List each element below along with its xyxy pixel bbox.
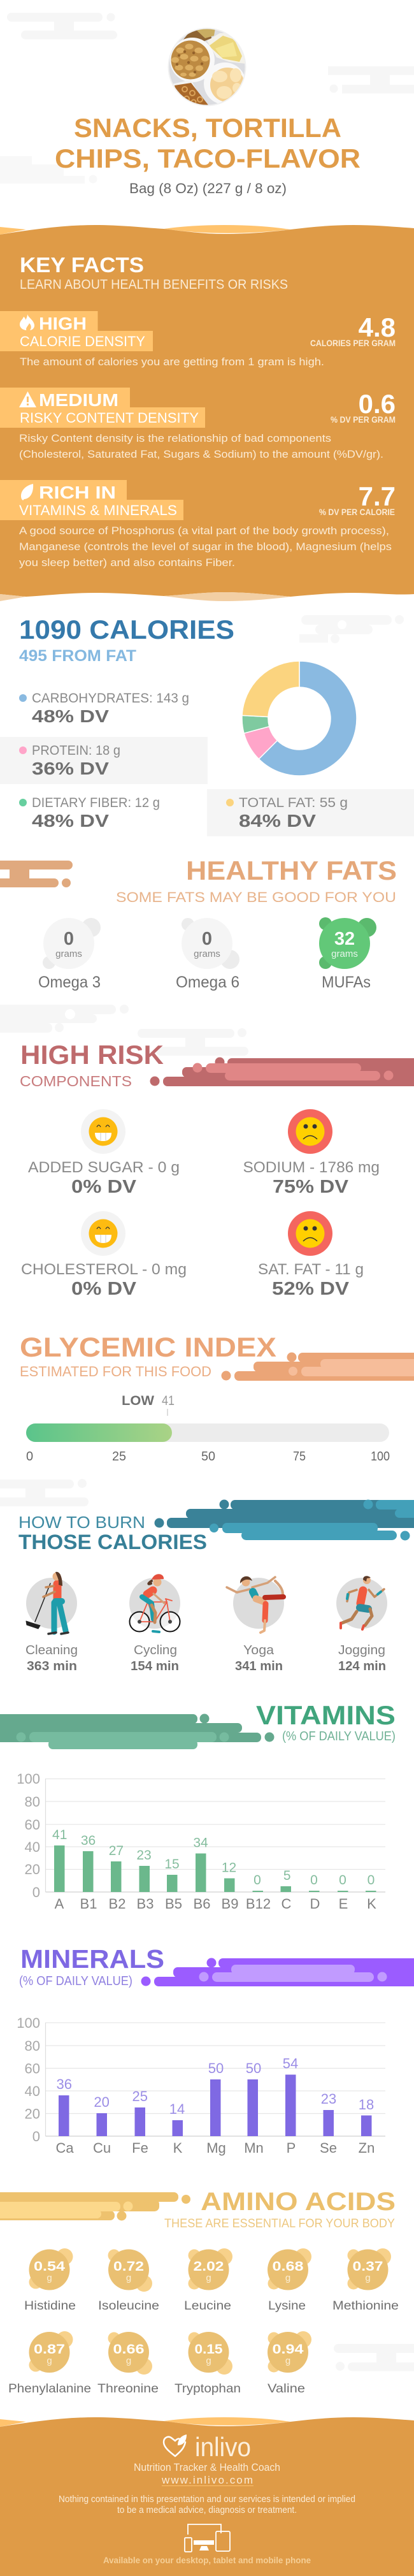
- footer disclaimer: [59, 2494, 355, 2515]
- section banner: how to burn: [154, 1499, 414, 1540]
- risk item: cholesterol: 0% DV: [71, 1279, 137, 1299]
- bar chart: minerals: 20: [94, 2094, 110, 2110]
- key fact: risky content density: MEDIUM: [39, 390, 118, 410]
- bar chart: vitamins: B9: [222, 1896, 238, 1912]
- activity labels: 154 min: [131, 1659, 179, 1673]
- legend: total fat: 84% DV: [239, 811, 316, 831]
- amino bubble: tryptophan: [175, 2332, 241, 2396]
- fat bubble: omega 3: grams: [55, 949, 82, 959]
- heading: healthy fats: [116, 855, 397, 905]
- activity: cycling: [129, 1574, 180, 1632]
- logo: inlivo: inlivo: [195, 2432, 251, 2462]
- fat bubble: omega 6: grams: [194, 949, 220, 959]
- section banner: amino acids: [0, 2192, 190, 2221]
- amino bubble: lysine: Lysine: [268, 2299, 306, 2313]
- food photo: bowls of snacks: [168, 28, 246, 106]
- panel: key facts background with waves: [0, 225, 414, 601]
- background cloud: calories: [299, 615, 404, 643]
- bar chart: minerals: 40: [25, 2083, 40, 2099]
- background cloud: amino acids: [334, 2344, 414, 2371]
- section banner: vitamins: [0, 1714, 274, 1749]
- glycemic index gauge: 0: [26, 1450, 33, 1464]
- key fact: rich in vitamins and minerals: Manganese (controls the level of sugar in the blood), Magnesium (helps: [19, 541, 392, 553]
- bar chart: vitamins: D: [310, 1896, 320, 1912]
- section banner: healthy fats: [0, 861, 73, 887]
- bar chart: vitamins: 0: [32, 1884, 40, 1900]
- activity: jogging: [336, 1576, 387, 1629]
- amino bubble: threonine: Threonine: [97, 2382, 159, 2396]
- key fact: rich in vitamins and minerals: 7.7: [359, 481, 396, 511]
- heading: key facts: LEARN ABOUT HEALTH BENEFITS OR RISKS: [20, 277, 288, 292]
- key fact: risky content density: (Cholesterol, Saturated Fat, Sugars & Sodium) to the amount (%DV/gr).: [19, 448, 383, 460]
- bar chart: vitamins: 60: [25, 1817, 40, 1833]
- bar chart: vitamins: 0: [339, 1873, 346, 1888]
- risk item: added sugar: 0% DV: [71, 1177, 137, 1197]
- bar chart: minerals: 54: [283, 2055, 298, 2072]
- fat bubble: MUFAs: 32: [334, 929, 355, 949]
- bar chart: minerals: Ca: [55, 2140, 74, 2156]
- amino bubble: phenylalanine: 0.87: [34, 2342, 65, 2357]
- heading: how to burn: [18, 1513, 207, 1554]
- key fact: rich in vitamins and minerals: VITAMINS & MINERALS: [19, 502, 177, 518]
- legend: carbohydrates: CARBOHYDRATES: 143 g: [32, 691, 189, 706]
- amino bubble: valine: [268, 2331, 311, 2396]
- heading: vitamins: [256, 1700, 396, 1743]
- risk item: sodium: 75% DV: [273, 1177, 349, 1197]
- risk item: saturated fat: [258, 1211, 364, 1299]
- icon: warning triangle: [19, 391, 36, 407]
- glycemic index gauge: [26, 1394, 390, 1464]
- glycemic index gauge: 100: [371, 1450, 390, 1464]
- glycemic index gauge: 50: [201, 1450, 215, 1464]
- fat bubble: omega 3: 0: [64, 929, 74, 949]
- bar chart: vitamins: B1: [80, 1896, 97, 1912]
- bar chart: vitamins: 34: [193, 1836, 208, 1850]
- amino bubble: lysine: 0.68: [273, 2259, 304, 2274]
- background cloud: top left: [7, 13, 117, 40]
- key fact: calorie density: 4.8: [359, 312, 396, 342]
- key fact: rich in vitamins and minerals: % DV PER CALORIE: [319, 507, 395, 517]
- amino bubble: valine: 0.94: [273, 2342, 304, 2357]
- heading: how to burn: THOSE CALORIES: [18, 1531, 207, 1554]
- activity labels: Jogging: [338, 1643, 385, 1657]
- amino bubble: leucine: 2.02: [194, 2259, 224, 2274]
- bar chart: minerals: Fe: [132, 2140, 148, 2156]
- footer tagline: Nutrition Tracker & Health Coach: [134, 2461, 280, 2473]
- risk item: added sugar: [28, 1109, 180, 1197]
- amino bubble: threonine: [97, 2332, 159, 2396]
- legend: dietary fiber: [19, 796, 160, 831]
- bar chart: minerals: 50: [246, 2060, 261, 2076]
- heading: vitamins: VITAMINS: [256, 1700, 396, 1730]
- heading: key facts: KEY FACTS: [20, 253, 144, 277]
- bar chart: vitamins: B6: [194, 1896, 210, 1912]
- amino bubble: histidine: 0.54: [34, 2259, 65, 2274]
- bar chart: vitamins: 100: [17, 1771, 40, 1787]
- key fact: risky content density: Risky Content density is the relationship of bad components: [19, 432, 331, 444]
- heading: minerals: MINERALS: [20, 1944, 164, 1974]
- amino bubble: tryptophan: 0.15: [195, 2342, 223, 2357]
- amino bubble: histidine: Histidine: [24, 2299, 76, 2313]
- bar chart: vitamins: 20: [25, 1861, 40, 1877]
- heading: amino acids: AMINO ACIDS: [201, 2188, 396, 2216]
- legend: dietary fiber: 48% DV: [32, 811, 109, 831]
- amino bubble: tryptophan: Tryptophan: [175, 2382, 241, 2396]
- glycemic index gauge: 25: [112, 1450, 126, 1464]
- heading: high risk: HIGH RISK: [20, 1040, 164, 1070]
- legend: protein: 36% DV: [32, 759, 109, 778]
- amino bubble: histidine: g: [46, 2273, 52, 2283]
- panel: protein band: [0, 737, 208, 784]
- bar chart: vitamins: B2: [109, 1896, 125, 1912]
- fat bubble: MUFAs: grams: [331, 949, 358, 959]
- bar chart: minerals: 0: [32, 2128, 40, 2144]
- amino bubble: isoleucine: 0.72: [113, 2259, 144, 2274]
- key fact: rich in vitamins and minerals: RICH IN: [39, 483, 116, 502]
- amino bubble: tryptophan: g: [206, 2355, 211, 2366]
- activity labels: 124 min: [338, 1659, 386, 1673]
- icon: flame: [20, 314, 34, 330]
- amino bubble: threonine: g: [126, 2355, 131, 2366]
- bar chart: minerals: 14: [169, 2101, 185, 2117]
- bar chart: vitamins: [17, 1771, 385, 1912]
- key fact: calorie density: [0, 311, 396, 368]
- bar chart: vitamins: 36: [81, 1833, 96, 1848]
- legend: protein: [19, 743, 120, 778]
- fat bubble: omega 6: 0: [202, 929, 212, 949]
- title: SNACKS, TORTILLA: [74, 113, 341, 143]
- bar chart: vitamins: 40: [25, 1839, 40, 1855]
- activity labels: 363 min: [27, 1659, 77, 1673]
- bar chart: vitamins: 27: [109, 1844, 124, 1858]
- logo: inlivo: [164, 2432, 251, 2462]
- icon: person on bicycle: [130, 1574, 180, 1632]
- heading: glycemic index: GLYCEMIC INDEX: [20, 1332, 276, 1363]
- legend: carbohydrates: 48% DV: [32, 706, 109, 726]
- glycemic index gauge: 41: [162, 1394, 175, 1408]
- amino bubble: methionine: Methionine: [332, 2299, 399, 2313]
- bar chart: minerals: 50: [208, 2060, 224, 2076]
- icon: person in dancer pose: [227, 1576, 283, 1633]
- bar chart: minerals: 20: [25, 2106, 40, 2121]
- amino bubble: leucine: [184, 2248, 232, 2313]
- bar chart: vitamins: 0: [253, 1873, 261, 1888]
- amino bubble: threonine: 0.66: [113, 2342, 144, 2357]
- risk item: saturated fat: 52% DV: [272, 1279, 350, 1299]
- fat bubble: omega 3: Omega 3: [38, 973, 101, 991]
- key fact: risky content density: [0, 388, 396, 460]
- bar chart: vitamins: 5: [283, 1868, 291, 1883]
- glycemic index gauge: LOW: [122, 1394, 154, 1408]
- key fact: rich in vitamins and minerals: [0, 480, 396, 569]
- heading: amino acids: [164, 2188, 396, 2230]
- amino bubble: isoleucine: g: [126, 2273, 131, 2283]
- fat bubble: MUFAs: MUFAs: [322, 973, 371, 991]
- background clouds: high risk: [0, 1005, 248, 1056]
- amino bubble: phenylalanine: [8, 2331, 91, 2396]
- panel: total fat band: [207, 789, 414, 836]
- bar chart: vitamins: 15: [164, 1857, 180, 1872]
- bar chart: minerals: Zn: [359, 2140, 375, 2156]
- legend: dietary fiber: DIETARY FIBER: 12 g: [32, 796, 160, 810]
- legend: protein: PROTEIN: 18 g: [32, 743, 120, 758]
- panel: footer background with wave: [0, 2417, 414, 2576]
- bar chart: vitamins: 23: [136, 1848, 152, 1863]
- bar chart: vitamins: 80: [25, 1794, 40, 1810]
- key fact: risky content density: % DV PER GRAM: [331, 415, 396, 425]
- icon: desktop, tablet and phone: [185, 2524, 230, 2552]
- bar chart: minerals: P: [287, 2140, 296, 2156]
- bar chart: minerals: Mn: [244, 2140, 264, 2156]
- fat bubble: omega 3: [38, 918, 101, 991]
- serving size: Bag (8 Oz) (227 g / 8 oz): [129, 180, 287, 196]
- bar chart: minerals: 18: [359, 2097, 374, 2113]
- heading: amino acids: THESE ARE ESSENTIAL FOR YOUR BODY: [164, 2216, 395, 2230]
- bar chart: vitamins: B12: [246, 1896, 271, 1912]
- icon: grinning face: [89, 1219, 117, 1248]
- heading: high risk: COMPONENTS: [20, 1073, 132, 1089]
- section banner: high risk: [150, 1057, 414, 1086]
- amino bubble: leucine: g: [206, 2273, 211, 2283]
- title: CHIPS, TACO-FLAVOR: [55, 143, 360, 173]
- bar chart: vitamins: K: [367, 1896, 376, 1912]
- title: [55, 113, 360, 173]
- bar chart: minerals: 100: [17, 2015, 40, 2031]
- heading: minerals: [19, 1944, 164, 1988]
- amino bubble: leucine: Leucine: [184, 2299, 231, 2313]
- fat bubble: omega 6: [176, 918, 239, 991]
- activity labels: 341 min: [235, 1659, 283, 1673]
- key fact: calorie density: HIGH: [39, 314, 87, 333]
- amino bubble: isoleucine: Isoleucine: [98, 2299, 159, 2313]
- key fact: risky content density: RISKY CONTENT DENSITY: [20, 410, 199, 426]
- key fact: calorie density: CALORIE DENSITY: [20, 333, 145, 349]
- icon: leaf: [21, 484, 33, 500]
- activity labels: Yoga: [243, 1643, 275, 1657]
- glycemic index gauge: 75: [293, 1450, 306, 1464]
- key fact: risky content density: 0.6: [359, 389, 396, 419]
- heading: high risk: [20, 1040, 164, 1089]
- heading: glycemic index: ESTIMATED FOR THIS FOOD: [20, 1364, 211, 1379]
- amino bubble: lysine: [268, 2248, 311, 2313]
- activity labels: [25, 1643, 386, 1673]
- risk item: cholesterol: [21, 1211, 187, 1299]
- bar chart: vitamins: 0: [368, 1873, 375, 1888]
- heading: calories: 495 FROM FAT: [19, 647, 136, 665]
- bar chart: minerals: [17, 2015, 385, 2156]
- activity labels: Cleaning: [25, 1643, 78, 1657]
- footer availability note: Available on your desktop, tablet and mobile phone: [103, 2555, 311, 2565]
- amino bubble: methionine: 0.37: [353, 2259, 383, 2274]
- bar chart: minerals: Cu: [93, 2140, 111, 2156]
- bar chart: minerals: Mg: [206, 2140, 226, 2156]
- risk item: saturated fat: SAT. FAT - 11 g: [258, 1261, 364, 1278]
- activity: yoga: [227, 1576, 284, 1633]
- legend: total fat: [226, 796, 348, 831]
- heading: key facts: [20, 253, 288, 292]
- legend: total fat: TOTAL FAT: 55 g: [239, 796, 348, 810]
- fat bubble: omega 6: Omega 6: [176, 973, 239, 991]
- legend: carbohydrates: [19, 691, 189, 726]
- heading: how to burn: HOW TO BURN: [18, 1513, 145, 1532]
- bar chart: vitamins: E: [339, 1896, 348, 1912]
- bar chart: vitamins: B5: [165, 1896, 182, 1912]
- amino bubble: phenylalanine: g: [46, 2355, 52, 2366]
- amino bubble: lysine: g: [285, 2273, 290, 2283]
- amino bubble: phenylalanine: Phenylalanine: [8, 2382, 91, 2396]
- background cloud: burn: [0, 1479, 89, 1506]
- heading: calories: 1090 CALORIES: [19, 615, 234, 644]
- heading: healthy fats: SOME FATS MAY BE GOOD FOR YOU: [116, 889, 396, 905]
- key fact: calorie density: The amount of calories you are getting from 1 gram is high.: [20, 356, 324, 368]
- risk item: sodium: [243, 1109, 380, 1197]
- heading: healthy fats: HEALTHY FATS: [186, 855, 397, 885]
- bar chart: vitamins: 0: [310, 1873, 318, 1888]
- activity: cleaning: [26, 1572, 77, 1634]
- bar chart: minerals: 80: [25, 2038, 40, 2054]
- bar chart: minerals: K: [173, 2140, 183, 2156]
- key fact: rich in vitamins and minerals: you sleep better) and also contains Fiber.: [19, 557, 235, 569]
- amino bubble: isoleucine: [98, 2249, 159, 2313]
- bar chart: minerals: 25: [132, 2088, 148, 2104]
- icon: grinning face: [89, 1117, 117, 1146]
- heading: calories: [19, 615, 234, 665]
- icon: person running: [341, 1576, 384, 1629]
- footer disclaimer: to be a medical advice, diagnosis or treatment.: [117, 2505, 297, 2515]
- footer disclaimer: Nothing contained in this presentation and our services is intended or implied: [59, 2494, 355, 2505]
- activity labels: Cycling: [134, 1643, 177, 1657]
- icon: sad face: [296, 1117, 325, 1146]
- icon: sad face: [296, 1219, 325, 1248]
- risk item: added sugar: ADDED SUGAR - 0 g: [28, 1159, 180, 1176]
- icon: person sweeping: [26, 1572, 68, 1634]
- bar chart: vitamins: 41: [52, 1828, 67, 1842]
- key fact: rich in vitamins and minerals: A good source of Phosphorus (a vital part of the body growth process),: [19, 525, 389, 537]
- section banner: glycemic index: [222, 1353, 414, 1381]
- risk item: cholesterol: CHOLESTEROL - 0 mg: [21, 1261, 187, 1278]
- amino bubble: methionine: [332, 2248, 399, 2313]
- bar chart: vitamins: B3: [137, 1896, 153, 1912]
- risk item: sodium: SODIUM - 1786 mg: [243, 1159, 380, 1176]
- donut chart: macronutrients: [242, 661, 357, 776]
- amino bubble: valine: g: [285, 2355, 290, 2366]
- section banner: minerals: [141, 1958, 414, 1986]
- amino bubble: methionine: g: [365, 2273, 371, 2283]
- bar chart: minerals: 60: [25, 2060, 40, 2077]
- key fact: calorie density: CALORIES PER GRAM: [310, 338, 396, 348]
- footer website: www.inlivo.com: [161, 2474, 253, 2486]
- background cloud: title left: [0, 156, 97, 184]
- amino bubble: valine: Valine: [268, 2382, 305, 2396]
- background cloud: top right: [328, 66, 414, 93]
- bar chart: minerals: 23: [321, 2091, 336, 2107]
- amino bubble: histidine: [24, 2248, 76, 2313]
- bar chart: vitamins: C: [282, 1896, 292, 1912]
- heading: vitamins: (% OF DAILY VALUE): [282, 1729, 396, 1743]
- heading: minerals: (% OF DAILY VALUE): [19, 1974, 132, 1988]
- bar chart: vitamins: 12: [222, 1860, 236, 1875]
- heading: glycemic index: [20, 1332, 276, 1379]
- fat bubble: MUFAs: [319, 917, 376, 991]
- bar chart: vitamins: A: [55, 1896, 64, 1912]
- bar chart: minerals: 36: [57, 2076, 72, 2092]
- bar chart: minerals: Se: [320, 2140, 337, 2156]
